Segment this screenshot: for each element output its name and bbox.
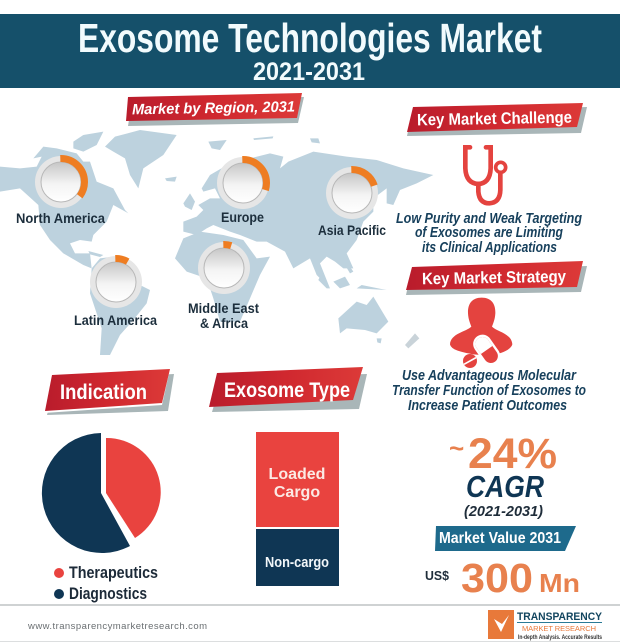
banner: market value [435,526,576,551]
challenge text [396,211,582,256]
banner text: Key Market Strategy [422,268,567,288]
donut: Middle East and Africa [198,242,250,294]
stat: CAGR period: (2021-2031) [464,503,543,520]
banner text: Key Market Challenge [417,109,572,129]
banner: exosome type [209,367,367,412]
banner text: Exosome Type [224,379,350,402]
banner text: Indication [60,381,147,404]
stat: CAGR percent: ~ [449,433,464,463]
challenge text: its Clinical Applications [422,240,557,256]
challenge text: Low Purity and Weak Targeting [396,211,582,227]
pie slice: therapeutics [106,438,161,538]
label: Europe: Europe [221,209,264,225]
banner: market value: Market Value 2031 [439,530,561,547]
banner: market by region [126,93,304,126]
label: Middle East and Africa: Middle East [188,300,259,316]
header band [0,14,620,88]
banner: key market strategy [406,261,587,295]
label: Asia Pacific: Asia Pacific [318,222,386,238]
world map: Americas [0,130,177,355]
stat: market value: US$ [425,568,450,583]
stat: market value: Mn [539,568,580,598]
donut: Latin America [90,256,142,308]
strategy text [392,368,586,414]
website: www.transparencymarketresearch.com [27,621,207,632]
logo: TRANSPARENCY [517,611,603,623]
donut: Europe [217,157,269,209]
challenge text: of Exosomes are Limiting [415,225,563,241]
stat: CAGR percent: 24% [468,430,557,478]
world map: Europe, Africa, Asia, Oceania [175,136,433,348]
strategy text: Use Advantageous Molecular [402,368,577,384]
subtitle years: 2021-2031 [253,58,365,86]
stacked bar: non-cargo [256,529,339,586]
stacked bar: loaded cargo: Loaded [269,466,325,483]
legend: diagnostics: Diagnostics [69,584,147,603]
strategy text: Increase Patient Outcomes [408,398,567,414]
strategy text: Transfer Function of Exosomes to [392,383,586,399]
label: North America: North America [16,210,105,226]
logo: MARKET RESEARCH [522,624,596,633]
logo [488,610,603,641]
banner: key market challenge [407,103,587,136]
label: Latin America: Latin America [74,312,157,328]
icon: patient with pill [450,298,512,369]
stacked bar: non-cargo: Non-cargo [265,554,329,571]
label: Middle East and Africa [188,300,259,331]
stacked bar: loaded cargo [256,432,339,527]
stacked bar: loaded cargo: Cargo [274,484,320,501]
pie chart: indication [42,433,161,553]
pie slice: diagnostics [42,433,130,553]
label: Middle East and Africa: & Africa [200,315,248,331]
stat: market value: 300 [461,555,533,601]
stat: CAGR label: CAGR [466,469,545,504]
donut: Asia Pacific [326,167,378,219]
stat: market value [425,555,580,601]
legend: therapeutics: Therapeutics [69,563,158,582]
donut: North America [35,156,87,208]
banner text: Market by Region, 2031 [132,99,295,118]
icon: stethoscope [465,147,506,203]
banner: indication [44,369,174,415]
